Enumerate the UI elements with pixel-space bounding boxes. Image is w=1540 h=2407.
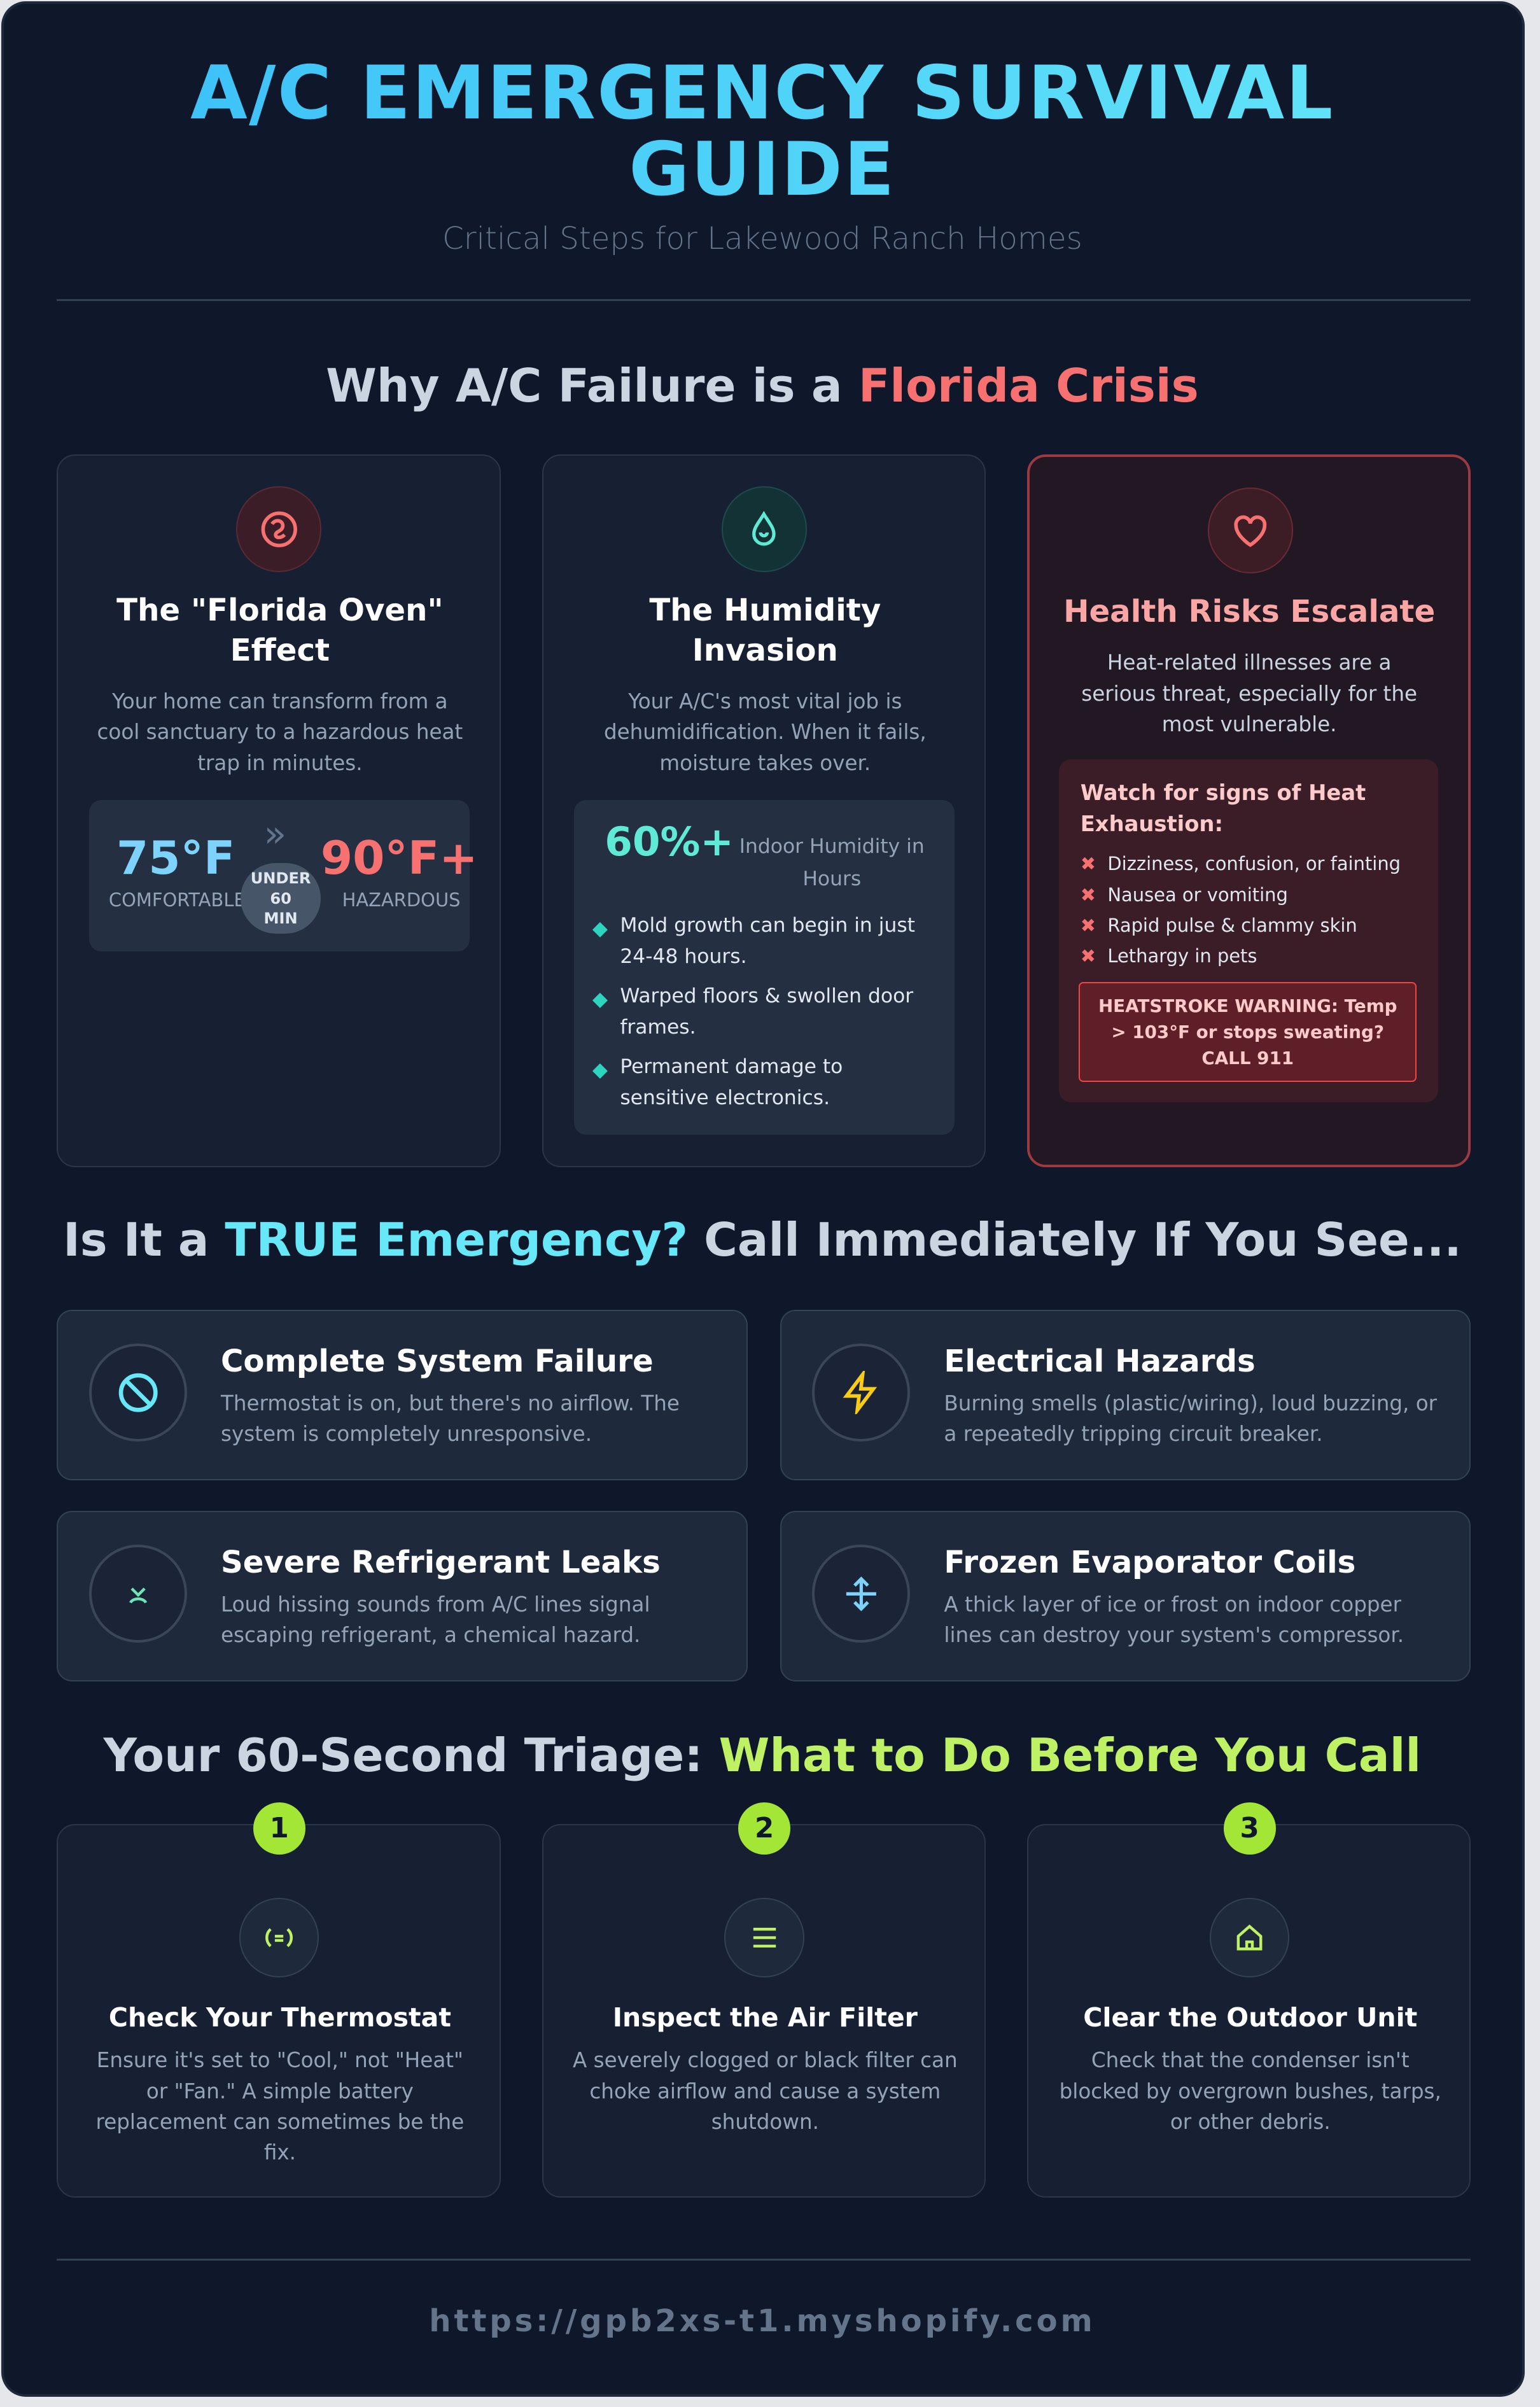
heat exhaustion box: ✖ Rapid pulse & clammy skin bbox=[1081, 915, 1357, 936]
emergency: frozen coils: A thick layer of ice or frost on indoor copper lines can destroy your system's compressor. bbox=[944, 1592, 1404, 1647]
card title: The Humidity bbox=[649, 593, 881, 628]
card title: Effect bbox=[230, 633, 330, 668]
footer url: https://gpb2xs-t1.myshopify.com bbox=[429, 2303, 1096, 2339]
panel: health risks bbox=[1027, 454, 1471, 1167]
emergency: complete failure: Complete System Failure bbox=[221, 1344, 654, 1379]
icon: leak bbox=[89, 1545, 187, 1643]
triage step 3 bbox=[1027, 1824, 1471, 2198]
emergency: refrigerant bbox=[57, 1511, 748, 1681]
heatstroke warning bbox=[1079, 982, 1417, 1082]
temperature comparison: 90°F+ bbox=[321, 832, 478, 885]
emergency: electrical bbox=[780, 1310, 1471, 1480]
icon: drop bbox=[722, 486, 807, 572]
icon: ban bbox=[89, 1344, 187, 1442]
triage step 3: Check that the condenser isn't blocked by overgrown bushes, tarps, or other debris. bbox=[1060, 2048, 1441, 2134]
desc: Your home can transform from a cool sanctuary to a hazardous heat trap in minutes. bbox=[97, 689, 463, 775]
emergency: electrical: Electrical Hazards bbox=[944, 1344, 1256, 1379]
card title bbox=[649, 593, 881, 668]
heading: true emergency: Is It a TRUE Emergency? Call Immediately If You See... bbox=[63, 1213, 1462, 1267]
triage step 2: Inspect the Air Filter bbox=[613, 2002, 918, 2033]
title: A/C EMERGENCY SURVIVAL bbox=[190, 51, 1334, 136]
temperature comparison: 60 bbox=[270, 890, 291, 908]
heat exhaustion box: ✖ Lethargy in pets bbox=[1081, 945, 1257, 967]
temperature comparison: 75°F bbox=[116, 832, 235, 885]
temperature comparison: UNDER bbox=[251, 869, 311, 887]
heat exhaustion box: Exhaustion: bbox=[1081, 811, 1223, 836]
temperature comparison: » bbox=[264, 812, 286, 855]
desc: Heat-related illnesses are a serious threat, especially for the most vulnerable. bbox=[1081, 650, 1417, 736]
temperature comparison: COMFORTABLE bbox=[109, 889, 246, 911]
humidity stats: Mold growth can begin in just 24-48 hours. bbox=[620, 914, 915, 968]
card title: Invasion bbox=[692, 633, 838, 668]
humidity stats: Indoor Humidity in Hours bbox=[739, 835, 925, 890]
triage step 1 bbox=[57, 1824, 501, 2198]
emergency: refrigerant: Loud hissing sounds from A/C lines signal escaping refrigerant, a chemical hazard. bbox=[221, 1592, 650, 1647]
heading: triage: Your 60-Second Triage: What to Do Before You Call bbox=[104, 1729, 1421, 1783]
emergency: frozen coils bbox=[780, 1511, 1471, 1681]
icon: thermostat bbox=[239, 1898, 319, 1977]
humidity stats bbox=[574, 800, 955, 1135]
emergency: complete failure bbox=[57, 1310, 748, 1480]
temperature comparison: HAZARDOUS bbox=[342, 889, 461, 911]
heat exhaustion box: Watch for signs of Heat bbox=[1081, 780, 1366, 805]
triage step 1: Check Your Thermostat bbox=[109, 2002, 451, 2033]
icon: filter bbox=[724, 1898, 804, 1977]
emergency: frozen coils: Frozen Evaporator Coils bbox=[944, 1545, 1355, 1580]
panel: humidity bbox=[542, 454, 986, 1167]
card title: Health Risks Escalate bbox=[1063, 594, 1435, 629]
card title bbox=[116, 593, 444, 668]
badge 2 bbox=[738, 1802, 790, 1855]
heatstroke warning: HEATSTROKE WARNING: Temp > 103°F or stops sweating? CALL 911 bbox=[1098, 995, 1397, 1069]
humidity stats: Permanent damage to sensitive electronics. bbox=[620, 1055, 843, 1109]
badge 2: 2 bbox=[755, 1813, 774, 1844]
triage step 2: A severely clogged or black filter can choke airflow and cause a system shutdown. bbox=[573, 2048, 958, 2134]
triage step 1: Ensure it's set to "Cool," not "Heat" or "Fan." A simple battery replacement can sometimes be the fix. bbox=[96, 2048, 464, 2165]
triage step 2 bbox=[542, 1824, 986, 2198]
emergency: refrigerant: Severe Refrigerant Leaks bbox=[221, 1545, 661, 1580]
title bbox=[0, 55, 1525, 209]
emergency: electrical: Burning smells (plastic/wiring), loud buzzing, or a repeatedly tripping circuit breaker. bbox=[944, 1391, 1437, 1446]
humidity stats: ◆ bbox=[592, 917, 608, 940]
heat exhaustion box: ✖ Dizziness, confusion, or fainting bbox=[1081, 853, 1401, 874]
humidity stats: ◆ bbox=[592, 1058, 608, 1081]
badge 1: 1 bbox=[270, 1813, 289, 1844]
title: GUIDE bbox=[629, 127, 896, 213]
humidity stats: ◆ bbox=[592, 988, 608, 1011]
triage step 3: Clear the Outdoor Unit bbox=[1083, 2002, 1417, 2033]
badge 1 bbox=[253, 1802, 305, 1855]
icon: heart bbox=[1208, 488, 1293, 573]
icon: snowflake arrows bbox=[812, 1545, 910, 1643]
badge 3: 3 bbox=[1240, 1813, 1259, 1844]
icon: house bbox=[1210, 1898, 1289, 1977]
badge 3 bbox=[1224, 1802, 1276, 1855]
heat exhaustion box bbox=[1059, 759, 1438, 1102]
panel: florida oven bbox=[57, 454, 501, 1167]
card title: The "Florida Oven" bbox=[116, 593, 444, 628]
heading: why: Why A/C Failure is a Florida Crisis bbox=[326, 360, 1199, 413]
emergency: complete failure: Thermostat is on, but there's no airflow. The system is completely unresponsive. bbox=[221, 1391, 680, 1446]
temperature comparison: MIN bbox=[264, 909, 298, 927]
humidity stats: 60%+ bbox=[605, 818, 734, 865]
icon: bolt bbox=[812, 1344, 910, 1442]
humidity stats: Warped floors & swollen door frames. bbox=[620, 985, 913, 1039]
temperature comparison bbox=[89, 800, 470, 951]
icon: flame bbox=[236, 486, 321, 572]
subtitle: Critical Steps for Lakewood Ranch Homes bbox=[442, 221, 1082, 256]
heat exhaustion box: ✖ Nausea or vomiting bbox=[1081, 884, 1288, 906]
desc: Your A/C's most vital job is dehumidification. When it fails, moisture takes over. bbox=[604, 689, 927, 775]
